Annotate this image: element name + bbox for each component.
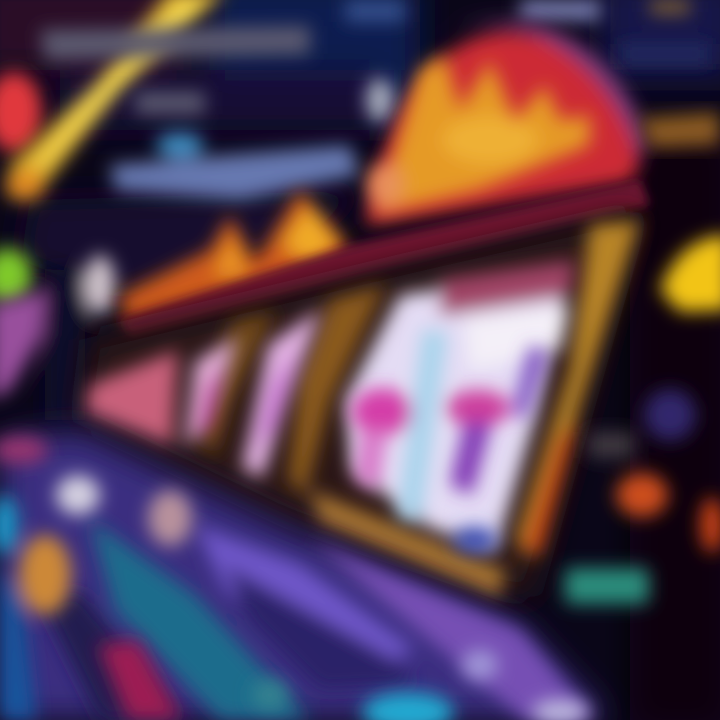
console: small lights and buttons	[0, 436, 588, 720]
left reels	[85, 308, 322, 478]
gold reel frames	[200, 220, 640, 598]
yellow diagonal light streak	[5, 0, 226, 201]
dark red diagonal band	[120, 180, 650, 336]
right cabinet: buttons	[565, 389, 720, 604]
machine topper: red fan	[365, 20, 648, 225]
cabinet behind reels	[80, 210, 640, 600]
purple side panel	[0, 255, 115, 420]
orange flame row	[120, 190, 345, 325]
console: purple and blue deck	[0, 430, 610, 720]
gold strip, top right	[640, 112, 720, 148]
green light	[0, 248, 32, 304]
red light, left edge	[0, 72, 42, 152]
main reel window	[345, 260, 575, 552]
topper: gold symbols	[367, 55, 590, 215]
right cabinet: yellow light	[660, 235, 720, 312]
reel symbols: magenta and purple sevens	[352, 329, 548, 553]
grey and blue light streaks	[40, 0, 710, 200]
